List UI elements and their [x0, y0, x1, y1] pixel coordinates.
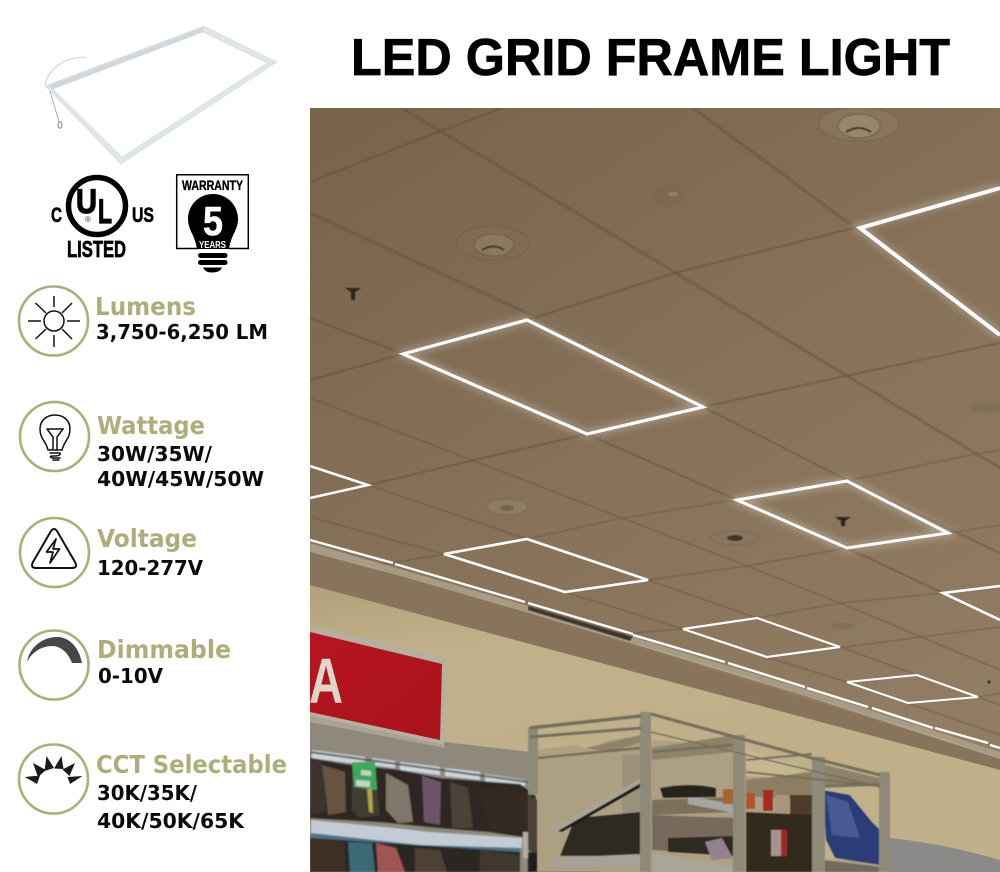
- UL listed certification logo: [51, 178, 154, 262]
- red store sign: [309, 626, 446, 748]
- heading: CCT selectable: CCT Selectable: [96, 750, 287, 779]
- hanging merchandise rack: [310, 748, 600, 872]
- light glow around frames: [403, 187, 1000, 548]
- value: wattage line 2: 40W/45W/50W: [97, 467, 264, 491]
- value: wattage line 1: 30W/35W/: [97, 442, 213, 466]
- grey lower wall, right: [889, 838, 1000, 872]
- ceiling surface: [310, 108, 1000, 808]
- 5 year warranty badge: WARRANTY: [182, 178, 243, 193]
- feature: dimmable: [20, 630, 231, 700]
- heading: wattage: Wattage: [97, 411, 205, 440]
- icon: sun: [19, 286, 88, 356]
- UL listed certification logo: C: [51, 204, 62, 227]
- icon: voltage triangle: [20, 518, 89, 587]
- strip light segments: [310, 540, 1000, 748]
- metal shelving unit: [528, 712, 890, 872]
- 5 year warranty badge: YEARS: [199, 239, 226, 251]
- value: voltage: 120-277V: [97, 556, 204, 580]
- icon: dimmer arc: [20, 630, 88, 700]
- feature: voltage: [20, 518, 204, 587]
- ceiling diffusers and sprinklers: [345, 107, 1000, 684]
- value: dimmable: 0-10V: [98, 664, 164, 688]
- soffit below the ceiling: [368, 567, 1000, 770]
- feature: wattage: [20, 402, 264, 491]
- ceiling grid lines: [310, 108, 1000, 735]
- wall: [310, 585, 1000, 872]
- heading: dimmable: Dimmable: [97, 635, 231, 664]
- grey wainscot: [310, 716, 530, 872]
- feature: lumens: [19, 286, 268, 356]
- 5 year warranty badge: 5: [203, 198, 223, 244]
- value: CCT line 1: 30K/35K/: [97, 781, 198, 805]
- red store sign: A: [309, 645, 343, 717]
- photo: store ceiling with LED grid frame lights: [309, 107, 1000, 872]
- 5 year warranty badge: [177, 175, 248, 272]
- UL listed certification logo: L: [98, 193, 112, 231]
- UL listed certification logo: US: [132, 204, 154, 227]
- LED grid frame panels: [310, 188, 1000, 703]
- UL listed certification logo: LISTED: [67, 236, 126, 262]
- heading: voltage: Voltage: [97, 524, 197, 553]
- value: CCT line 2: 40K/50K/65K: [97, 809, 246, 833]
- long linear LED strip: [310, 543, 1000, 758]
- UL listed certification logo: ®: [85, 215, 91, 224]
- icon: light bulb: [20, 402, 89, 471]
- title: LED GRID FRAME LIGHT: [351, 29, 950, 87]
- heading: lumens: Lumens: [95, 292, 196, 321]
- icon: sunrise: [19, 744, 88, 814]
- feature: CCT selectable: [19, 744, 287, 833]
- value: lumens: 3,750-6,250 LM: [96, 320, 268, 344]
- UL listed certification logo: U: [76, 183, 97, 221]
- product image: LED frame: [45, 26, 277, 164]
